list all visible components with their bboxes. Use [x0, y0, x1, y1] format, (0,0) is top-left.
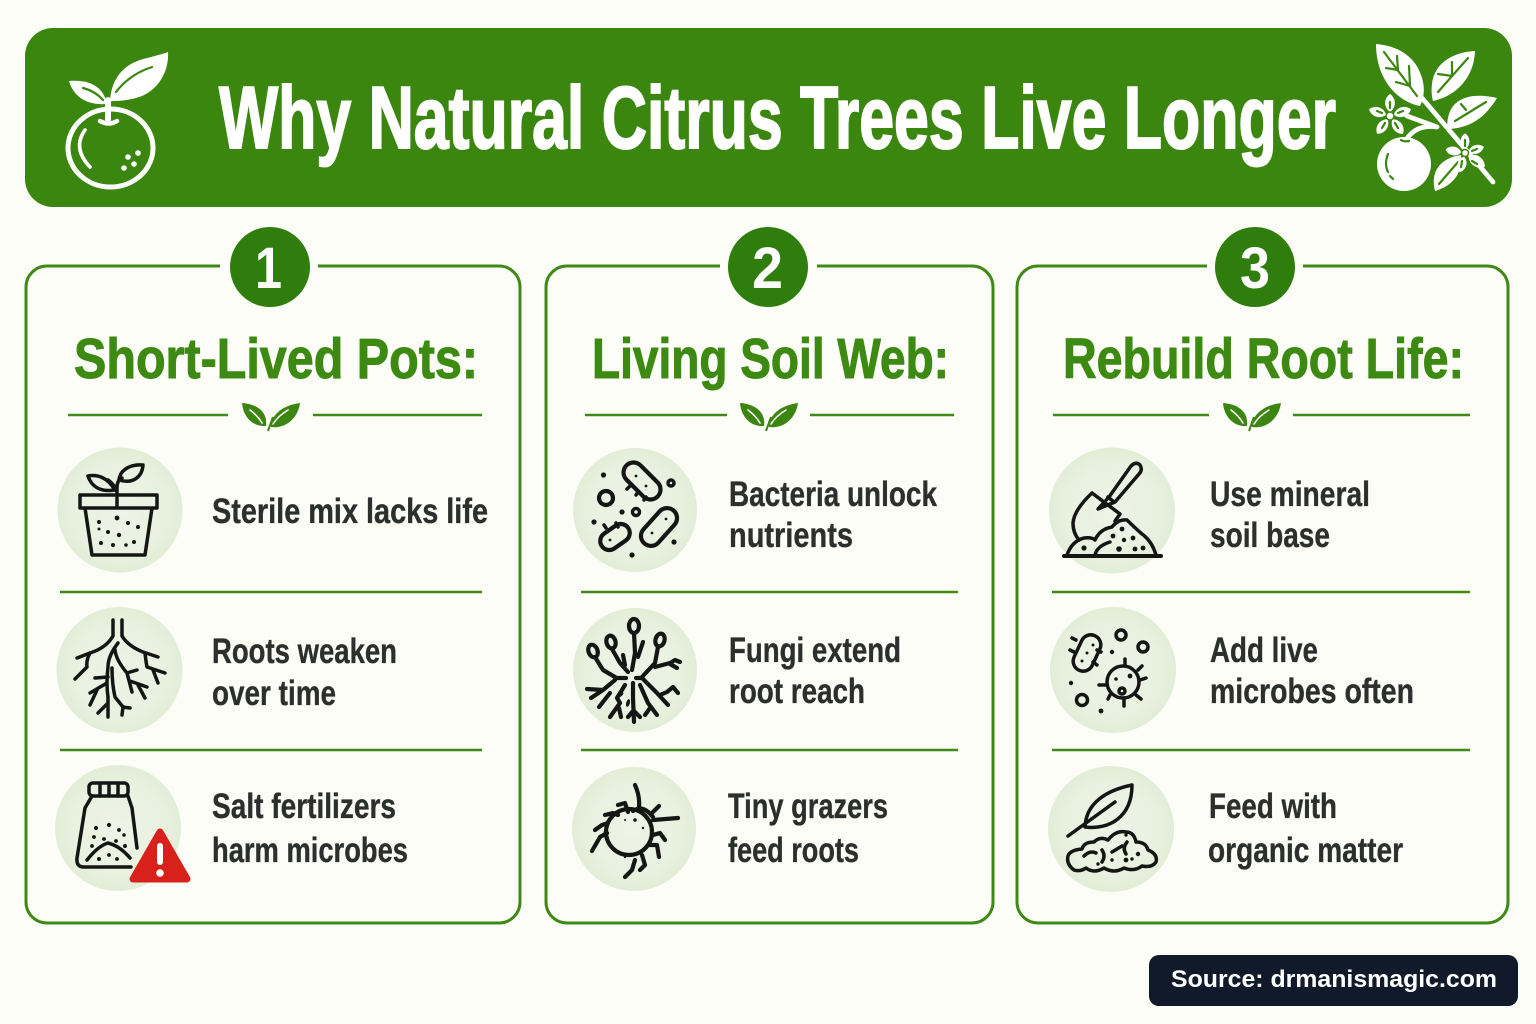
text: Tiny grazers [728, 787, 888, 826]
text: harm microbes [212, 831, 408, 870]
text: feed roots [728, 831, 859, 870]
row: grazers [572, 767, 888, 891]
number badge 3 [1215, 227, 1295, 307]
text: Add live [1210, 631, 1318, 670]
icon: fungal network [587, 619, 680, 722]
text: root reach [729, 672, 865, 711]
text: soil base [1210, 516, 1330, 555]
row: sterile mix [58, 448, 488, 572]
text: Feed with [1209, 787, 1337, 826]
number badge 1: 1 [255, 236, 282, 301]
panel: rebuild root life [1017, 227, 1508, 923]
text: Salt fertilizers [212, 787, 396, 826]
row: fungi [573, 608, 901, 732]
icon: red warning triangle [133, 832, 187, 879]
heading: short-lived pots: Short-Lived Pots: [74, 327, 478, 391]
ornament: leaf divider [68, 403, 482, 431]
text: nutrients [729, 516, 853, 555]
text: Roots weaken [212, 632, 397, 671]
row: roots weaken [56, 607, 397, 733]
icon: roots [75, 620, 165, 717]
icon: citrus branch with fruit and blossoms [1368, 44, 1497, 191]
row: bacteria [573, 448, 937, 572]
source tag [1149, 955, 1518, 1006]
icon: microbes [1069, 630, 1148, 713]
icon: bacteria [591, 458, 681, 558]
icon: leaf and compost [1068, 785, 1156, 871]
number badge 2 [728, 227, 808, 307]
icon: soil mite [592, 785, 678, 877]
row: mineral soil [1049, 448, 1370, 574]
number badge 3: 3 [1240, 236, 1270, 301]
panel: short-lived pots [26, 227, 520, 923]
panel: living soil web [546, 227, 993, 923]
text: Fungi extend [729, 631, 901, 670]
number badge 1 [230, 227, 310, 307]
ornament: leaf divider [1053, 403, 1470, 431]
icon: citrus fruit with leaves [68, 52, 168, 187]
header banner [25, 28, 1512, 207]
ornament: leaf divider [585, 403, 954, 431]
heading: living soil web: Living Soil Web: [592, 327, 949, 391]
text: Bacteria unlock [729, 475, 937, 514]
row: organic matter [1048, 766, 1403, 892]
text: Sterile mix lacks life [212, 492, 488, 531]
row: live microbes [1050, 607, 1414, 733]
text: microbes often [1210, 672, 1414, 711]
source tag: Source: drmanismagic.com [1171, 966, 1497, 993]
text: over time [212, 674, 336, 713]
number badge 2: 2 [752, 236, 783, 301]
row: salt fertilizers [55, 765, 408, 891]
text: Use mineral [1210, 475, 1370, 514]
icon: potted seedling [80, 465, 157, 555]
icon: fertilizer bottle [77, 783, 137, 867]
icon: trowel and soil [1064, 463, 1161, 556]
text: organic matter [1208, 831, 1403, 870]
